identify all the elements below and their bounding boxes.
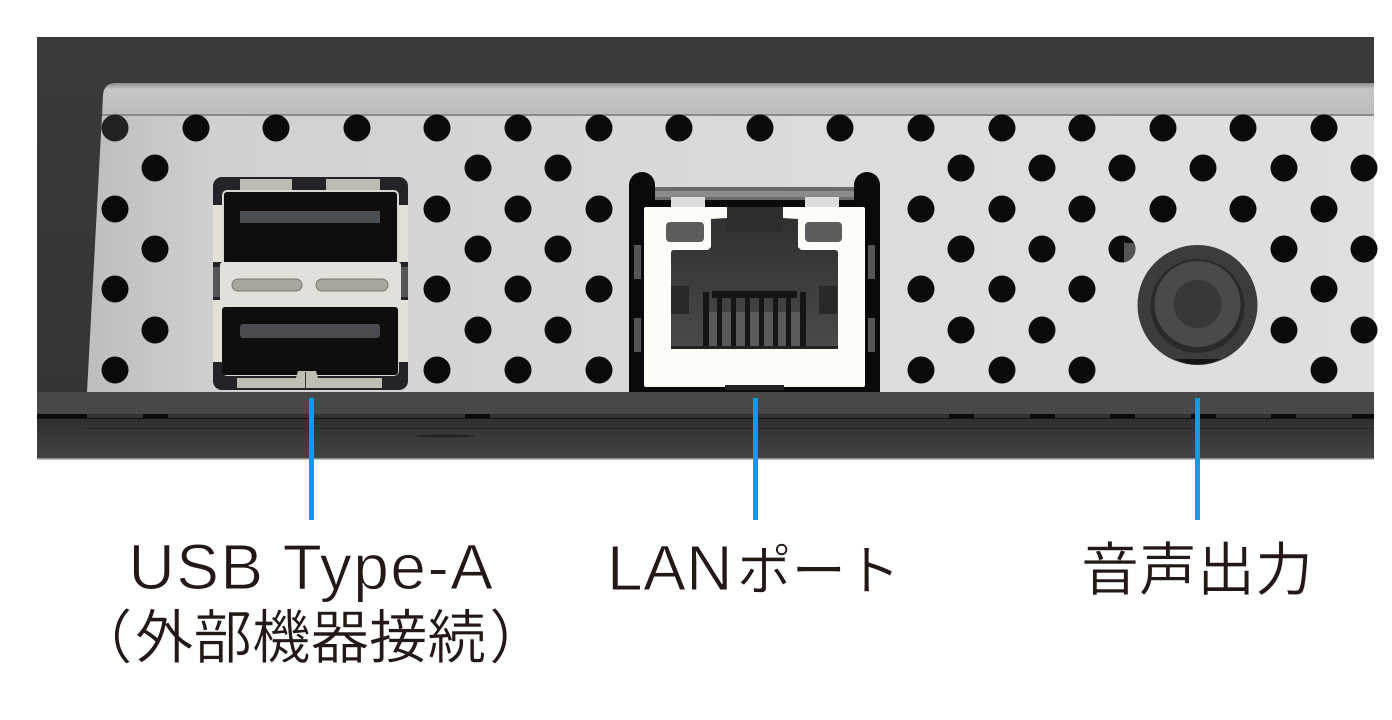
label: LAN port: LAN: [607, 532, 733, 604]
device body: [37, 37, 1374, 460]
icon: USB Type-A double port: [213, 177, 408, 390]
perforated holes: [102, 114, 1378, 384]
callout line: USB: [309, 398, 314, 520]
callout line: audio: [1195, 398, 1200, 520]
callout line: LAN: [753, 398, 758, 520]
icon: audio output jack: [1138, 245, 1258, 365]
icon: LAN RJ-45 port: [629, 172, 880, 392]
label: USB Type-A: USB Type-A: [128, 531, 494, 603]
metal port plate: [87, 83, 1374, 392]
label: audio output: 音声出力: [1081, 538, 1313, 603]
label: external device connection: ）: [489, 606, 548, 671]
label: LAN port: ポート: [737, 541, 901, 602]
label: external device connection: 外部機器接続: [135, 606, 486, 671]
label: external device connection: （: [74, 606, 133, 671]
